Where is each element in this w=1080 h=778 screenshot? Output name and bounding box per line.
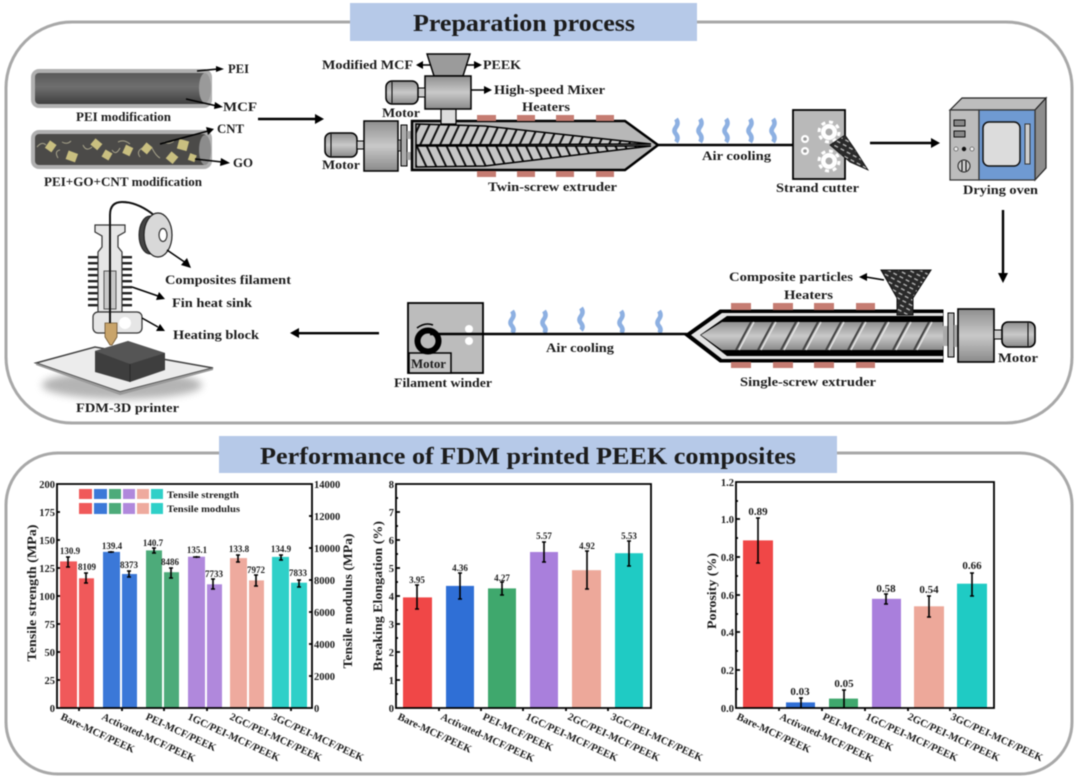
heading: Preparation process <box>350 3 697 41</box>
axis labels: 1 <box>389 676 394 687</box>
left axis labels: 175 <box>39 508 55 519</box>
legend: Tensile modulus <box>167 504 241 514</box>
chart: porosity <box>704 478 1045 765</box>
right axis labels: 0 <box>314 704 319 715</box>
single-screw extruder: Single-screw extruder <box>740 375 877 389</box>
value labels: 7972 <box>247 565 266 575</box>
rod: PEI+GO+CNT modification: PEI+GO+CNT modification <box>44 175 202 189</box>
value labels: 0.03 <box>790 686 810 698</box>
gearbox <box>364 121 398 171</box>
category labels: Activated-MCF/PEEK <box>100 712 198 765</box>
left axis labels: 100 <box>39 592 55 603</box>
value labels: 5.53 <box>621 531 637 541</box>
single-screw extruder <box>685 270 1039 389</box>
category labels: Activated-MCF/PEEK <box>439 712 537 765</box>
heading: Preparation process: Preparation process <box>413 11 635 37</box>
value labels: 7733 <box>205 569 224 579</box>
icon: FDM-3D printer: Heating block <box>173 328 259 342</box>
mixer <box>441 109 456 124</box>
value labels: 0.66 <box>962 560 982 572</box>
value labels: 139.4 <box>102 541 123 551</box>
icon: drying oven <box>950 98 1046 197</box>
air cooling: upper line <box>656 119 838 163</box>
arrow: winder to printer <box>290 328 379 338</box>
single-screw extruder: Motor <box>998 351 1039 365</box>
left axis labels <box>39 480 55 715</box>
rod: PEI+GO+CNT modification: CNT <box>217 122 245 136</box>
category labels: Bare-MCF/PEEK <box>396 712 474 756</box>
twin-screw extruder: Twin-screw extruder <box>488 180 618 194</box>
arrow: modification to extruder <box>258 114 324 124</box>
twin-screw extruder <box>322 54 658 194</box>
frame and ticks <box>57 484 312 711</box>
panel: performance <box>6 453 1072 774</box>
value labels <box>748 506 982 698</box>
category labels: 1GC/PEI-MCF/PEEK <box>524 712 620 764</box>
axis labels: 0 <box>389 704 394 715</box>
value labels: 133.8 <box>229 544 250 554</box>
left axis labels: 0 <box>50 704 55 715</box>
rod: PEI+GO+CNT modification: GO <box>233 156 253 170</box>
value labels <box>409 531 637 585</box>
category labels: PEI-MCF/PEEK <box>144 712 218 754</box>
axis title: tensile strength: Tensile strength (MPa) <box>24 524 39 662</box>
icon: FDM-3D printer: Fin heat sink <box>172 296 252 310</box>
axis labels: 0.0 <box>721 704 734 715</box>
twin-screw extruder: PEEK <box>483 58 521 72</box>
value labels: 0.89 <box>748 506 768 518</box>
axis labels: 7 <box>389 508 394 519</box>
frame and ticks <box>736 482 994 711</box>
right axis labels: 8000 <box>314 576 335 587</box>
category labels: PEI-MCF/PEEK <box>481 712 555 754</box>
icon: FDM-3D printer: Composites filament <box>165 273 292 287</box>
heading: Performance of FDM printed PEEK composites <box>219 436 837 473</box>
category labels: Bare-MCF/PEEK <box>59 712 137 756</box>
axis labels <box>389 480 395 715</box>
error bars <box>415 541 631 609</box>
category labels: 3GC/PEI-MCF/PEEK <box>949 712 1045 764</box>
category labels: 2GC/PEI-MCF/PEEK <box>566 712 662 764</box>
value labels: 130.9 <box>60 546 81 556</box>
value labels: 0.54 <box>919 584 939 596</box>
left axis labels: 75 <box>44 620 55 631</box>
spool <box>139 216 161 254</box>
left axis labels: 125 <box>39 564 55 575</box>
rod: PEI modification: PEI modification <box>76 110 171 124</box>
category labels: 2GC/PEI-MCF/PEEK <box>228 712 324 764</box>
axis labels <box>721 478 735 715</box>
rod: PEI modification <box>31 62 257 124</box>
category labels <box>735 712 1045 765</box>
bars <box>743 540 987 708</box>
value labels: 3.95 <box>409 575 425 585</box>
air cooling: lower line <box>510 308 660 355</box>
axis labels: 3 <box>389 620 394 631</box>
axis labels: 1.0 <box>721 515 734 526</box>
left axis labels: 50 <box>44 648 55 659</box>
axis labels: 8 <box>389 480 394 491</box>
panel: preparation process <box>6 22 1072 423</box>
strand cutter: Strand cutter <box>776 181 860 195</box>
icon: FDM-3D printer <box>36 202 292 415</box>
axis labels: 0.6 <box>721 591 734 602</box>
icon: FDM-3D printer: FDM-3D printer <box>76 401 180 415</box>
bars <box>403 552 643 708</box>
heaters <box>477 115 614 177</box>
filament winder: Filament winder <box>394 376 492 390</box>
right axis labels: 2000 <box>314 672 335 683</box>
category labels: 3GC/PEI-MCF/PEEK <box>270 712 366 764</box>
twin-screw extruder: Motor <box>382 106 420 120</box>
filament winder: Motor <box>411 357 446 371</box>
axis labels: 0.4 <box>721 628 735 639</box>
air cooling: lower line: Air cooling <box>546 341 615 355</box>
chart: breaking elongation <box>370 480 705 765</box>
twin-screw extruder: High-speed Mixer <box>494 83 606 97</box>
right axis labels: 10000 <box>314 544 340 555</box>
right axis labels: 14000 <box>314 480 340 491</box>
value labels: 4.92 <box>579 541 595 551</box>
category labels: 1GC/PEI-MCF/PEEK <box>186 712 282 764</box>
heading: Performance of FDM printed PEEK composites: Performance of FDM printed PEEK composites <box>260 444 796 470</box>
frame and ticks <box>396 484 651 711</box>
left axis labels: 200 <box>39 480 55 491</box>
air cooling: upper line: Air cooling <box>702 149 772 163</box>
category labels <box>396 712 705 765</box>
hot end <box>88 256 132 306</box>
bars <box>60 550 307 708</box>
axis title: Porosity (%) <box>704 553 719 629</box>
rod: PEI modification: PEI <box>228 62 249 76</box>
right axis labels: 4000 <box>314 640 335 651</box>
axis labels: 2 <box>389 648 394 659</box>
legend: Tensile strength <box>167 490 239 500</box>
twin-screw extruder: Heaters <box>522 100 570 114</box>
filament winder <box>394 303 687 390</box>
value labels: 8109 <box>78 562 96 572</box>
arrow: oven to single-screw extruder <box>998 210 1008 283</box>
arrow: cutter to oven <box>870 138 940 148</box>
left axis labels: 150 <box>39 536 55 547</box>
value labels: 5.57 <box>536 531 552 541</box>
value labels: 0.05 <box>834 678 854 690</box>
single-screw extruder: Composite particles <box>729 270 853 284</box>
axis labels: 6 <box>389 536 394 547</box>
error bars <box>756 518 974 708</box>
value labels: 140.7 <box>143 538 164 548</box>
legend <box>79 489 241 514</box>
rod: PEI modification: MCF <box>223 100 257 114</box>
left axis labels: 25 <box>44 676 55 687</box>
value labels: 4.36 <box>452 563 468 573</box>
axis labels: 5 <box>389 564 394 575</box>
category labels <box>59 712 366 765</box>
right axis labels <box>314 480 340 715</box>
strand cutter <box>776 110 868 195</box>
category labels: 3GC/PEI-MCF/PEEK <box>609 712 705 764</box>
value labels: 135.1 <box>187 545 208 555</box>
value labels: 4.27 <box>494 573 510 583</box>
value labels: 0.58 <box>876 583 896 595</box>
right axis labels: 12000 <box>314 512 340 523</box>
axis labels: 0.8 <box>721 553 734 564</box>
category labels: 2GC/PEI-MCF/PEEK <box>906 712 1002 764</box>
value labels: 8486 <box>161 557 180 567</box>
axis title: tensile modulus: Tensile modulus (MPa) <box>340 534 355 668</box>
rod: PEI+GO+CNT modification <box>31 122 253 189</box>
chart: tensile strength and modulus <box>24 480 366 765</box>
barrel <box>412 121 658 170</box>
category labels: Activated-MCF/PEEK <box>778 712 876 765</box>
axis labels: 4 <box>389 592 395 603</box>
twin-screw extruder: Motor <box>322 158 360 172</box>
category labels: Bare-MCF/PEEK <box>735 712 813 756</box>
category labels: PEI-MCF/PEEK <box>821 712 895 754</box>
icon: drying oven: Drying oven <box>963 183 1038 197</box>
value labels: 7833 <box>289 568 308 578</box>
right axis labels: 6000 <box>314 608 335 619</box>
labels: Modified MCF <box>322 58 413 72</box>
value labels: 8373 <box>120 560 138 570</box>
error bars <box>66 548 301 589</box>
axis title: Breaking Elongation (%) <box>370 521 385 671</box>
icon: left motor <box>325 133 364 157</box>
value labels <box>60 538 308 579</box>
category labels: 1GC/PEI-MCF/PEEK <box>864 712 960 764</box>
axis labels: 1.2 <box>721 478 734 489</box>
single-screw extruder: Heaters <box>784 288 833 302</box>
value labels: 134.9 <box>271 544 292 554</box>
axis labels: 0.2 <box>721 666 734 677</box>
